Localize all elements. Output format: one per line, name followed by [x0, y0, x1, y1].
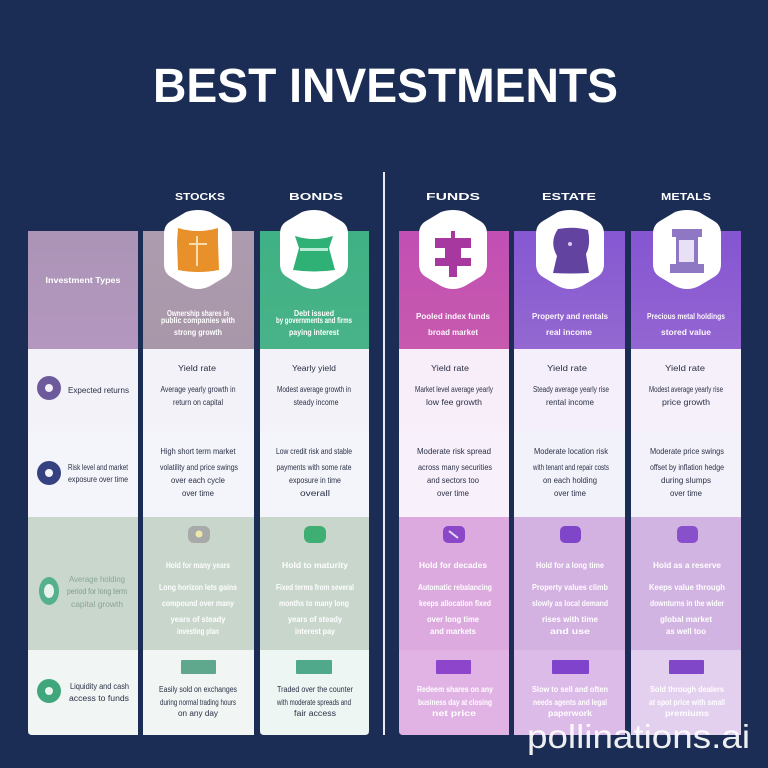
title: BEST INVESTMENTS — [153, 60, 618, 113]
row 3 label: Average holding — [69, 575, 125, 584]
row 4 cell: at spot price with small — [649, 698, 725, 707]
row 3 cell: over long time — [427, 615, 480, 624]
row 3 cell — [514, 517, 625, 650]
icon: orange asset badge — [164, 210, 232, 289]
column: stocks — [143, 192, 254, 735]
row 2 cell: over time — [554, 489, 587, 498]
row 3 cell: Long horizon lets gains — [159, 583, 237, 592]
row 2 cell: Moderate location risk — [534, 447, 609, 456]
row 3 cell — [399, 517, 509, 650]
row 2 cell: Low credit risk and stable — [276, 447, 352, 456]
column: bonds: paying interest — [289, 328, 339, 337]
row 1 cell: Steady average yearly rise — [533, 385, 609, 394]
row 3 cell: years of steady — [170, 615, 226, 624]
row 2 cell: overall — [300, 489, 330, 498]
row 3 label: capital growth — [71, 600, 123, 609]
row 1 cell: Market level average yearly — [415, 385, 493, 394]
column: bonds: by governments and firms — [276, 316, 352, 325]
row 3 cell: global market — [660, 615, 712, 624]
row 1 cell: Yield rate — [547, 364, 588, 373]
row 2 cell: over time — [182, 489, 215, 498]
row 2 cell — [399, 431, 509, 517]
row 3 cell: and markets — [430, 627, 477, 636]
row 3 cell: years of steady — [288, 615, 342, 624]
row 2 label: exposure over time — [68, 475, 128, 484]
row 4 cell: with moderate spreads and — [276, 698, 351, 707]
row 4 cell: needs agents and legal — [533, 698, 607, 707]
row 1 cell: Average yearly growth in — [160, 385, 236, 394]
row 1 cell: Yield rate — [665, 364, 706, 373]
row 4 cell: Slow to sell and often — [532, 685, 608, 694]
row 2 cell: and sectors too — [427, 476, 480, 485]
row 3 cell — [631, 517, 741, 650]
row 4 cell: Redeem shares on any — [417, 685, 493, 694]
icon: purple asset badge — [536, 210, 604, 289]
row 3 cell: investing plan — [177, 627, 219, 636]
row 1 cell — [631, 349, 741, 431]
row 4 cell — [514, 650, 625, 735]
row 4 cell — [399, 650, 509, 735]
row 2 cell: with tenant and repair costs — [532, 463, 609, 472]
row 1 label — [28, 349, 138, 431]
row 1 cell: Yield rate — [431, 364, 470, 373]
row 1 cell — [399, 349, 509, 431]
icon: magenta asset badge — [419, 210, 487, 289]
row 2 cell: across many securities — [418, 463, 492, 472]
column: funds: broad market — [428, 328, 478, 337]
row 3 cell: rises with time — [542, 615, 599, 624]
header panel — [631, 231, 741, 349]
column name: ESTATE — [542, 192, 596, 203]
row 2 label: Risk level and market — [68, 463, 129, 472]
column name: STOCKS — [175, 192, 225, 203]
row 2 cell: Moderate price swings — [650, 447, 724, 456]
column: commodities — [631, 192, 741, 735]
row 3 cell: Hold as a reserve — [653, 561, 722, 570]
row 3 cell: Keeps value through — [649, 583, 725, 592]
icon: green asset badge — [280, 210, 348, 289]
divider line — [383, 172, 385, 735]
row 2 cell: Moderate risk spread — [417, 447, 491, 456]
row 3 cell: downturns in the wider — [650, 599, 724, 608]
row 4 label: Liquidity and cash — [70, 682, 129, 691]
row 4 cell: net price — [432, 709, 477, 718]
row 3 label: period for long term — [67, 587, 127, 596]
row 3 cell: months to many long — [279, 599, 349, 608]
row 2 cell: exposure in time — [289, 476, 341, 485]
row 1 cell — [260, 349, 369, 431]
row 4 cell — [143, 650, 254, 735]
row 2 cell: offset by inflation hedge — [650, 463, 724, 472]
row 3 cell: Fixed terms from several — [276, 583, 354, 592]
row 3 cell: Property values climb — [532, 583, 608, 592]
row 4 cell — [631, 650, 741, 735]
row 2 label — [28, 431, 138, 517]
row 2 cell: on each holding — [543, 476, 597, 485]
header panel — [260, 231, 369, 349]
row 4 cell: Traded over the counter — [277, 685, 353, 694]
header text: Debt issued — [294, 309, 334, 318]
row 4 cell: premiums — [665, 709, 710, 718]
row 4 cell: during normal trading hours — [160, 698, 236, 707]
header text: Precious metal holdings — [647, 312, 725, 321]
row 1 cell: Yearly yield — [292, 364, 336, 373]
row 2 cell: during slumps — [661, 476, 711, 485]
row 2 cell: volatility and price swings — [160, 463, 238, 472]
row 1 cell: Modest average yearly rise — [649, 385, 723, 394]
column: funds — [399, 192, 509, 735]
row 4 cell: fair access — [294, 709, 336, 718]
column: stocks: public companies with — [161, 316, 235, 325]
row 1 cell: low fee growth — [426, 398, 482, 407]
label header text: Investment Types — [46, 276, 121, 285]
row 3 cell: and use — [550, 627, 591, 636]
row 2 cell: over time — [437, 489, 470, 498]
header text: Pooled index funds — [416, 312, 491, 321]
row 1 cell: Yield rate — [178, 364, 217, 373]
row 2 cell — [260, 431, 369, 517]
row 3 cell: Hold to maturity — [282, 561, 349, 570]
row 4 cell — [260, 650, 369, 735]
column: real estate: real income — [546, 328, 593, 337]
header panel — [514, 231, 625, 349]
header text: Ownership shares in — [167, 309, 229, 318]
column name: BONDS — [289, 192, 343, 203]
row 4 label: access to funds — [69, 694, 129, 703]
row 3 cell: as well too — [666, 627, 706, 636]
column name: FUNDS — [426, 192, 481, 203]
row 2 cell — [631, 431, 741, 517]
row 3 cell: keeps allocation fixed — [419, 599, 491, 608]
row 1 cell — [514, 349, 625, 431]
row 4 cell: business day at closing — [418, 698, 492, 707]
icon: lilac asset badge — [653, 210, 721, 289]
row 3 cell: Automatic rebalancing — [418, 583, 492, 592]
label header panel — [28, 231, 138, 349]
row 3 cell — [143, 517, 254, 650]
column: commodities: stored value — [661, 328, 712, 337]
row 3 cell: Hold for a long time — [536, 561, 604, 570]
column: real estate — [514, 192, 625, 735]
row 3 cell: Hold for decades — [419, 561, 488, 570]
row 3 cell: compound over many — [162, 599, 234, 608]
row 1 label: Expected returns — [68, 386, 129, 395]
watermark: pollinations.ai — [527, 718, 750, 755]
row 1 cell: steady income — [294, 398, 339, 407]
row 3 cell — [260, 517, 369, 650]
row 4 cell: Easily sold on exchanges — [159, 685, 237, 694]
column name: METALS — [661, 192, 711, 203]
column: row labels — [28, 231, 138, 735]
row 3 label — [28, 517, 138, 650]
row 4 label — [28, 650, 138, 735]
header panel — [143, 231, 254, 349]
column: bonds — [260, 192, 369, 735]
row 1 cell: rental income — [546, 398, 595, 407]
row 2 cell: over time — [670, 489, 703, 498]
row 3 cell: Hold for many years — [166, 561, 230, 570]
row 4 cell: on any day — [178, 709, 218, 718]
row 2 cell: High short term market — [160, 447, 236, 456]
row 3 cell: interest pay — [295, 627, 335, 636]
row 1 cell — [143, 349, 254, 431]
row 2 cell: over each cycle — [171, 476, 226, 485]
row 2 cell: payments with some rate — [276, 463, 352, 472]
column: stocks: strong growth — [174, 328, 222, 337]
row 2 cell — [514, 431, 625, 517]
row 4 cell: paperwork — [548, 709, 593, 718]
row 1 cell: price growth — [662, 398, 710, 407]
row 2 cell — [143, 431, 254, 517]
header panel — [399, 231, 509, 349]
header text: Property and rentals — [532, 312, 609, 321]
row 1 cell: return on capital — [173, 398, 223, 407]
row 3 cell: slowly as local demand — [532, 599, 608, 608]
row 1 cell: Modest average growth in — [277, 385, 351, 394]
row 4 cell: Sold through dealers — [650, 685, 725, 694]
